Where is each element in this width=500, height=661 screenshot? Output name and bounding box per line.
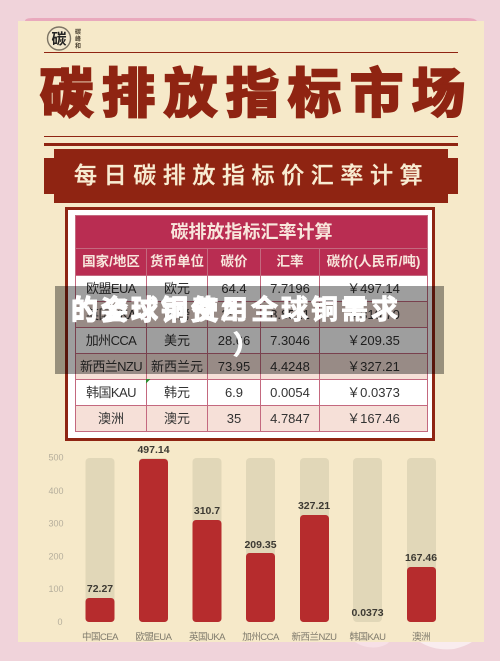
y axis labels: 200: [48, 552, 64, 562]
y axis labels: 300: [48, 518, 64, 528]
table: carbon price exchange rate: 韩国KAU: [86, 385, 136, 400]
table: carbon price exchange rate: 6.9: [225, 385, 243, 400]
caption: overlapping white text: 的姿球铜费2: [71, 296, 239, 326]
table: carbon price exchange rate: 64.4: [221, 281, 247, 296]
banner: subtitle: [44, 149, 458, 203]
category labels: 新西兰NZU: [291, 631, 337, 643]
icon: brand logo: 碳: [75, 28, 81, 36]
table: carbon price exchange rate: 澳元: [164, 411, 190, 426]
bar values: [86, 459, 436, 622]
table: carbon price exchange rate: 0.0054: [270, 385, 310, 400]
bar chart: [48, 445, 437, 643]
value labels: [87, 444, 437, 619]
table: carbon price exchange rate: 英镑: [164, 307, 190, 322]
table: carbon price exchange rate: 4.4248: [270, 359, 310, 374]
category labels: 英国UKA: [189, 631, 226, 643]
banner: subtitle: 每日碳排放指标价汇率计算: [74, 162, 429, 188]
table: carbon price exchange rate: ￥327.21: [347, 359, 400, 374]
table: carbon price exchange rate: 新西兰NZU: [80, 359, 142, 374]
value labels: 167.46: [405, 552, 437, 564]
table: carbon price exchange rate: 新西兰元: [151, 359, 203, 374]
caption: overlapping white text: ）: [233, 330, 262, 360]
table: carbon price exchange rate: 35.1: [221, 307, 247, 322]
table: carbon price exchange rate: 35: [227, 411, 241, 426]
table: carbon price exchange rate: 7.7196: [270, 281, 310, 296]
overlay band: [55, 286, 444, 374]
table: carbon price exchange rate: 碳价(人民币/吨): [327, 254, 420, 269]
value labels: 209.35: [244, 539, 277, 551]
category labels: 澳洲: [412, 631, 430, 643]
category labels: [82, 631, 430, 643]
value labels: 0.0373: [351, 607, 384, 619]
y axis labels: 500: [48, 452, 64, 462]
value labels: 327.21: [298, 500, 330, 512]
table: carbon price exchange rate: 欧盟EUA: [86, 281, 136, 296]
table: carbon price exchange rate: 国家/地区: [82, 254, 140, 269]
table: carbon price exchange rate: 澳洲: [98, 411, 124, 426]
y axis labels: 0: [57, 617, 63, 627]
category labels: 韩国KAU: [349, 631, 386, 643]
table: carbon price exchange rate: 碳排放指标汇率计算: [171, 222, 333, 242]
table: carbon price exchange rate: 汇率: [276, 254, 304, 269]
table: carbon price exchange rate: 欧元: [164, 281, 190, 296]
y axis labels: 400: [48, 486, 64, 496]
table: carbon price exchange rate: ￥497.14: [347, 281, 400, 296]
table: carbon price exchange rate: 货币单位: [150, 254, 204, 269]
table: carbon price exchange rate: ￥209.35: [347, 333, 400, 348]
category labels: 欧盟EUA: [135, 631, 173, 643]
value labels: 72.27: [87, 583, 113, 595]
table: carbon price exchange rate: 28.66: [218, 333, 250, 348]
table: carbon price exchange rate: 碳价: [220, 254, 248, 269]
y axis labels: 100: [48, 584, 64, 594]
y axis labels: [48, 452, 64, 627]
panel: table frame: [65, 207, 435, 441]
title: 碳排放指标市场: [40, 65, 474, 124]
table: carbon price exchange rate: 加州CCA: [86, 333, 136, 348]
icon: brand logo: [46, 26, 81, 51]
icon: brand logo: 碳: [51, 31, 67, 48]
table: carbon price exchange rate: 英国UKA: [86, 307, 136, 322]
table: carbon price exchange rate: 韩元: [164, 385, 190, 400]
icon: green cell marker: [146, 379, 150, 384]
table: carbon price exchange rate: ￥167.46: [347, 411, 400, 426]
table: carbon price exchange rate: 7.3046: [270, 333, 310, 348]
table: carbon price exchange rate: 4.7847: [270, 411, 310, 426]
bar tracks: [86, 458, 436, 622]
icon: brand logo: 和: [75, 42, 81, 50]
table: carbon price exchange rate: ￥0.0373: [347, 385, 400, 400]
icon: brand logo: 峰: [75, 35, 81, 43]
category labels: 中国CEA: [82, 631, 119, 643]
table: carbon price exchange rate: ￥310.70: [347, 307, 400, 322]
table: carbon price exchange rate: 8.8521: [270, 307, 310, 322]
table: carbon price exchange rate: [75, 215, 428, 432]
value labels: 310.7: [194, 505, 220, 517]
category labels: 加州CCA: [242, 632, 280, 643]
caption: overlapping white text: [71, 294, 401, 360]
table: carbon price exchange rate: 73.95: [218, 359, 250, 374]
caption: overlapping white text: 的全球铜使用全球铜需求: [71, 295, 401, 325]
table: carbon price exchange rate: 美元: [164, 333, 190, 348]
